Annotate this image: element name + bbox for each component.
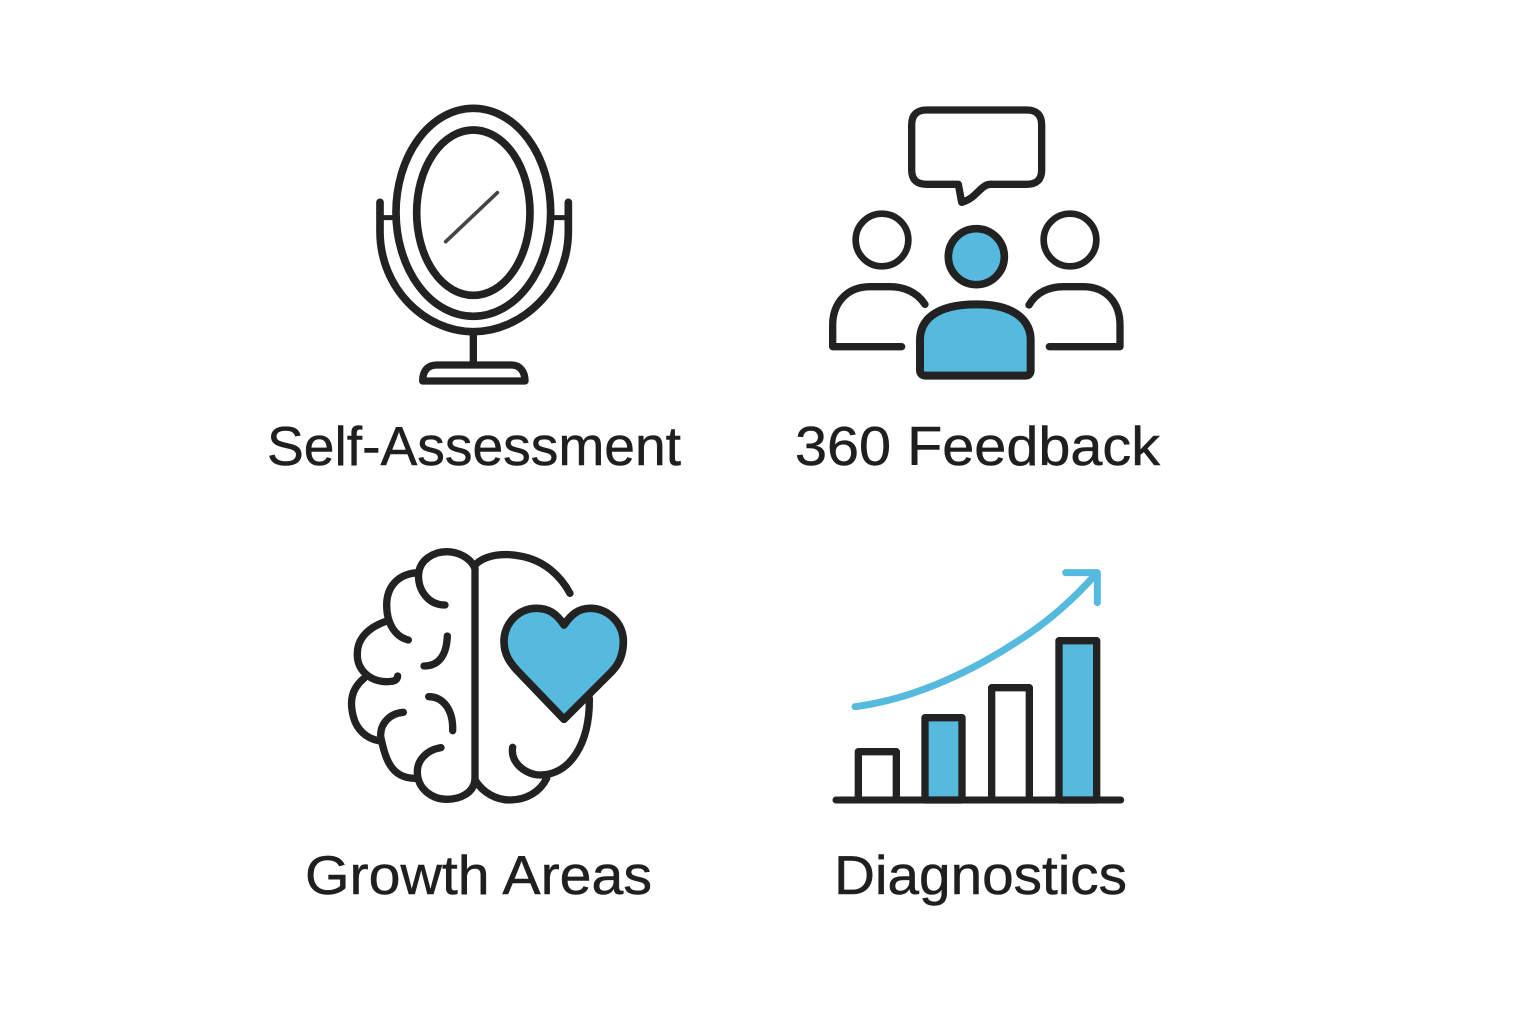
icon: rising bar chart with arrow — [836, 573, 1121, 800]
icon: 360 feedback group with speech bubble — [833, 110, 1120, 376]
icon: mirror — [380, 108, 568, 381]
label: Growth Areas: Growth Areas — [305, 844, 652, 906]
label: Self-Assessment: Self-Assessment — [267, 415, 681, 477]
label: Diagnostics: Diagnostics — [834, 844, 1127, 906]
label: 360 Feedback: 360 Feedback — [795, 415, 1161, 477]
icon: brain with heart — [352, 552, 623, 800]
